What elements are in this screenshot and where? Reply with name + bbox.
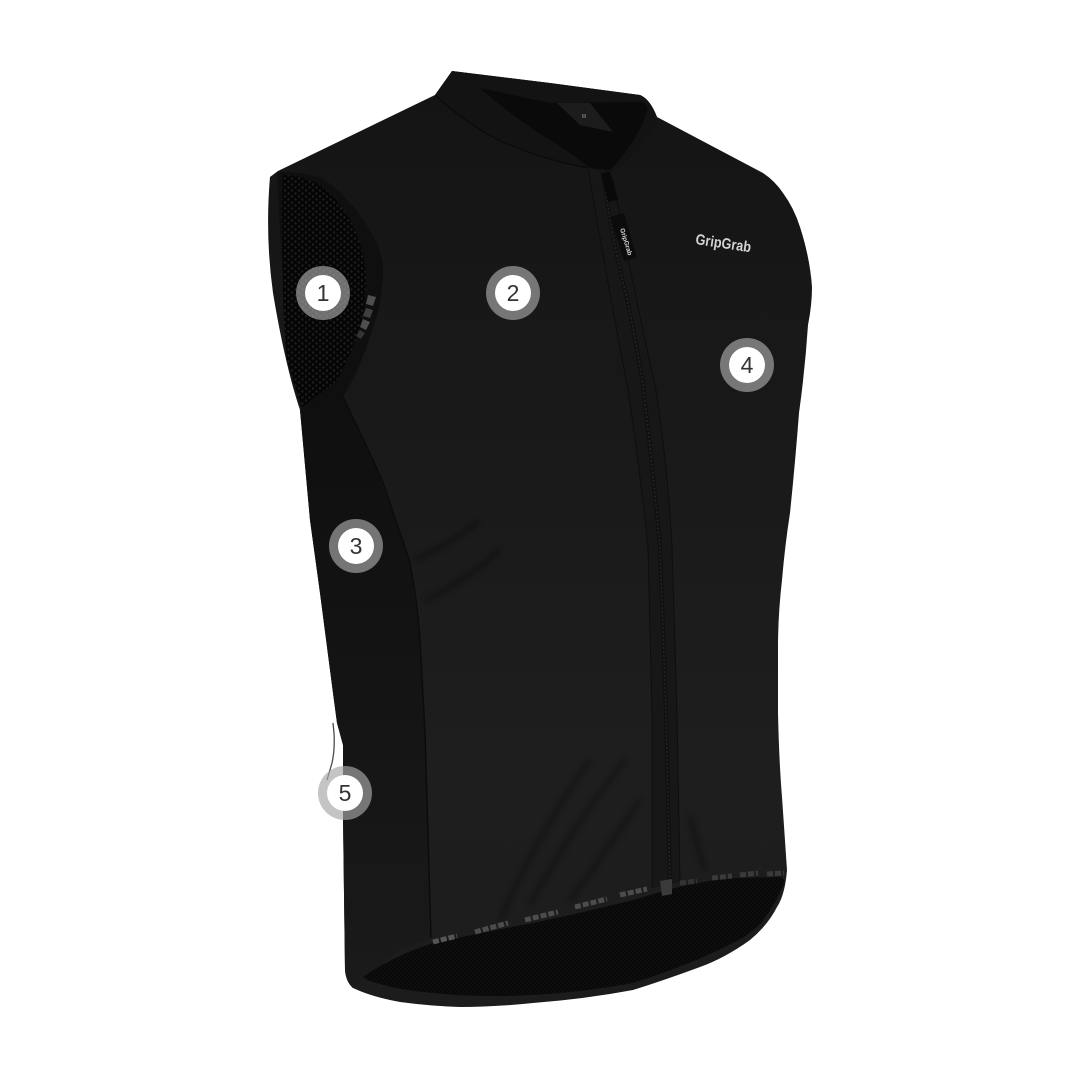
marker 5 xyxy=(318,766,372,820)
marker 1: 1 xyxy=(317,280,329,306)
vest body xyxy=(268,71,812,1007)
marker 3 xyxy=(329,519,383,573)
neck interior xyxy=(480,88,648,170)
armhole trim xyxy=(277,172,383,410)
collar label xyxy=(557,103,613,132)
zip pull xyxy=(601,172,637,261)
zipper cord loop xyxy=(327,723,334,780)
marker 1 xyxy=(296,266,350,320)
garment folds xyxy=(415,520,705,920)
marker 3: 3 xyxy=(350,533,362,559)
marker 5: 5 xyxy=(339,780,351,806)
left armhole mesh xyxy=(282,175,366,407)
marker 2 xyxy=(486,266,540,320)
hem reflective dashes xyxy=(433,873,784,942)
side panel xyxy=(300,397,431,988)
zip pull: GripGrab xyxy=(618,228,633,256)
brand logo: GripGrab xyxy=(694,231,752,256)
collar xyxy=(435,71,657,172)
collar: M xyxy=(582,114,586,120)
main zip xyxy=(588,167,680,888)
zip base xyxy=(660,879,672,896)
armhole reflective dashes xyxy=(356,295,376,339)
hem interior mesh xyxy=(363,877,784,996)
marker 4 xyxy=(720,338,774,392)
marker 2: 2 xyxy=(507,280,519,306)
marker 4: 4 xyxy=(741,352,754,378)
